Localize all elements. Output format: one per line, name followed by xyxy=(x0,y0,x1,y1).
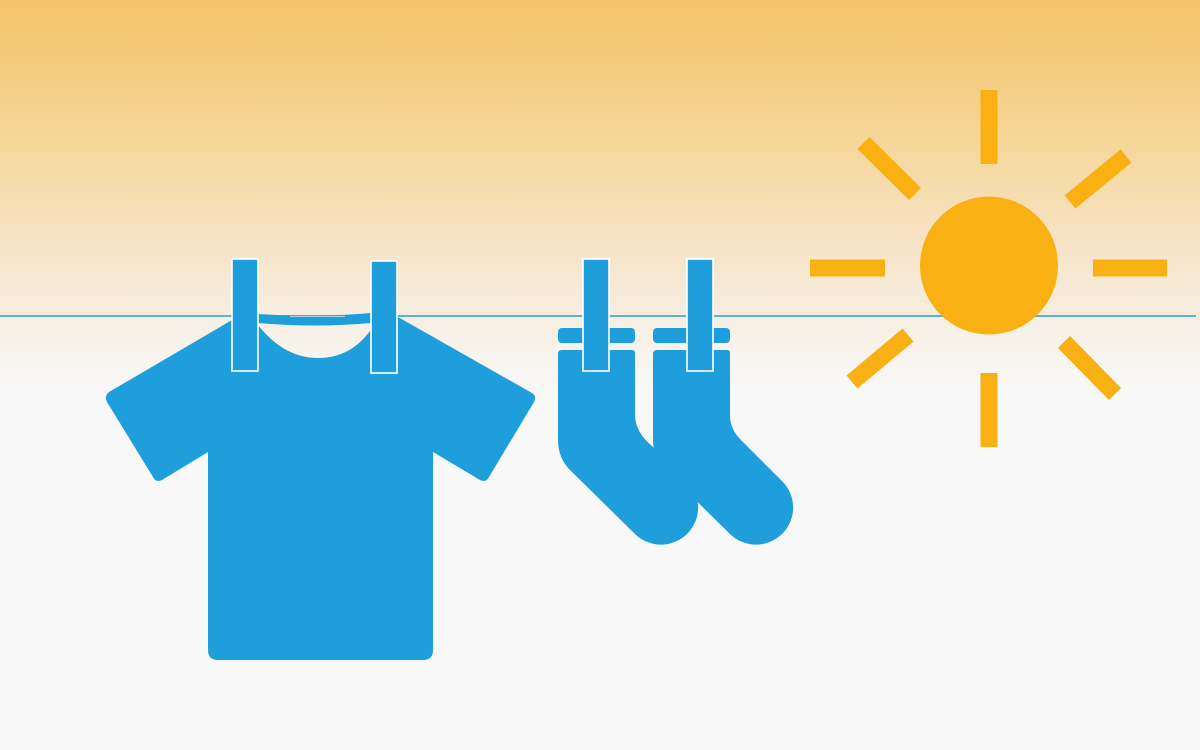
sun disc xyxy=(920,196,1058,334)
left clothes peg xyxy=(232,259,258,371)
right sock xyxy=(653,350,793,545)
collar highlight xyxy=(290,316,345,317)
clothesline xyxy=(0,315,1196,317)
t-shirt body xyxy=(106,317,535,660)
left sock xyxy=(558,350,698,545)
icon: pair of socks xyxy=(558,259,793,545)
icon: t-shirt xyxy=(106,259,535,660)
sun rays xyxy=(810,90,1167,447)
icon: sun xyxy=(810,90,1167,447)
right clothes peg xyxy=(371,261,397,373)
left sock peg xyxy=(583,259,609,371)
right sock cuff xyxy=(653,328,730,343)
right sock peg xyxy=(687,259,713,371)
left sock cuff xyxy=(558,328,635,343)
t-shirt collar xyxy=(258,313,371,326)
